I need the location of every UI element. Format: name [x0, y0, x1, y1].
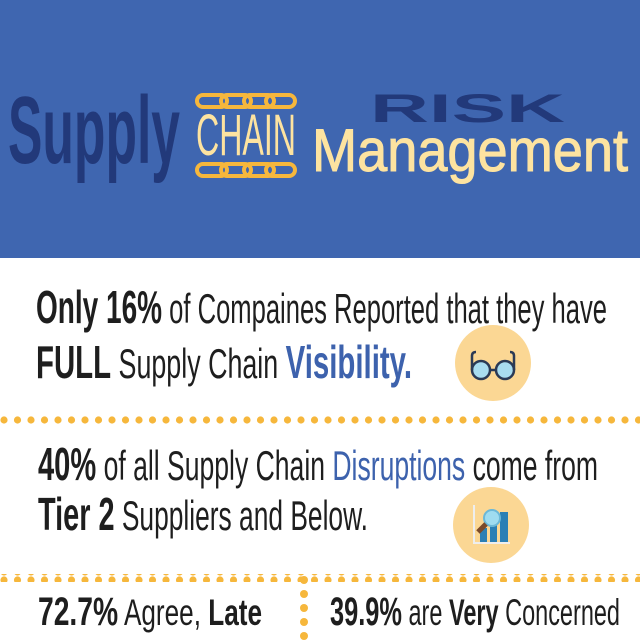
icon: chain top	[197, 95, 295, 107]
title: RISK: RISK	[370, 87, 565, 131]
title: Supply: Supply	[8, 77, 180, 184]
stat 1 line 2: FULL Supply Chain Visibility.	[36, 336, 412, 388]
title: CHAIN: CHAIN	[196, 103, 296, 168]
divider dots 2	[0, 574, 640, 582]
stat 2 line 2: Tier 2 Suppliers and Below.	[38, 488, 368, 540]
divider dots 1	[0, 416, 640, 424]
icon: chart with magnifier	[453, 487, 529, 563]
icon: chain bottom	[197, 164, 295, 176]
vertical dots divider	[300, 576, 308, 640]
icon: glasses	[455, 325, 531, 401]
stat 3 text: 72.7% Agree, Late	[38, 590, 262, 634]
header banner	[0, 0, 640, 258]
